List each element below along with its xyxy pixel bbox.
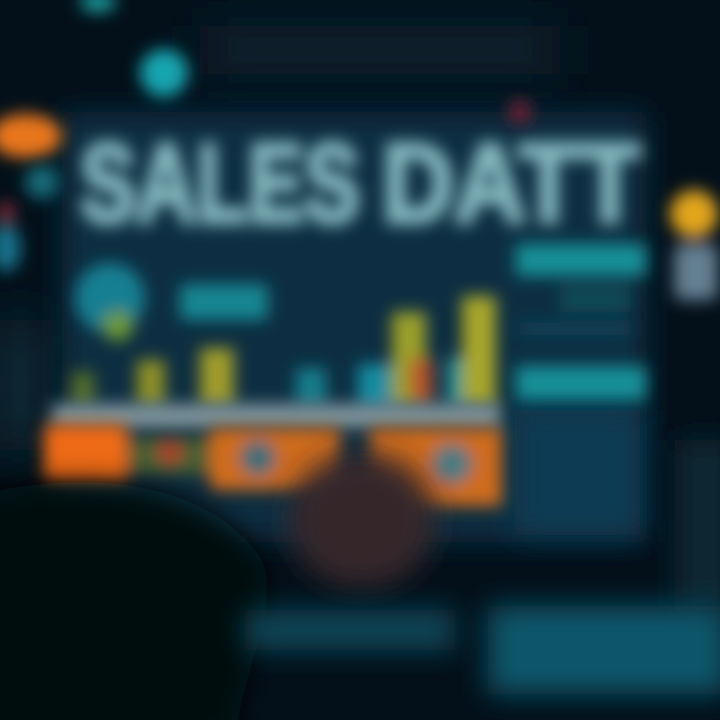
icon: left teal spot xyxy=(25,165,59,199)
laptop right xyxy=(488,606,720,694)
panel: dashboard screen xyxy=(62,112,647,542)
orange data band xyxy=(44,424,502,506)
title: SALES xyxy=(80,121,360,246)
right side shadow xyxy=(675,440,720,610)
sidebar column xyxy=(515,410,640,535)
icon: top teal circle xyxy=(140,49,188,97)
icon: left orange tag xyxy=(0,114,62,158)
icon: top edge teal spot xyxy=(80,0,116,12)
pie chart xyxy=(75,263,145,341)
background glow xyxy=(0,25,560,450)
icon: right yellow marker xyxy=(670,190,718,300)
silhouette: head xyxy=(288,452,436,588)
sidebar teal bars xyxy=(516,244,646,400)
icon: red dot xyxy=(508,100,532,124)
title: DATT xyxy=(382,121,640,246)
title xyxy=(80,121,640,246)
laptop left xyxy=(245,610,455,650)
silhouette: person foreground xyxy=(0,482,267,720)
legend text block xyxy=(180,284,268,320)
bar chart xyxy=(72,296,496,408)
chart base strip xyxy=(52,404,500,428)
icon: left edge spots xyxy=(0,203,21,272)
